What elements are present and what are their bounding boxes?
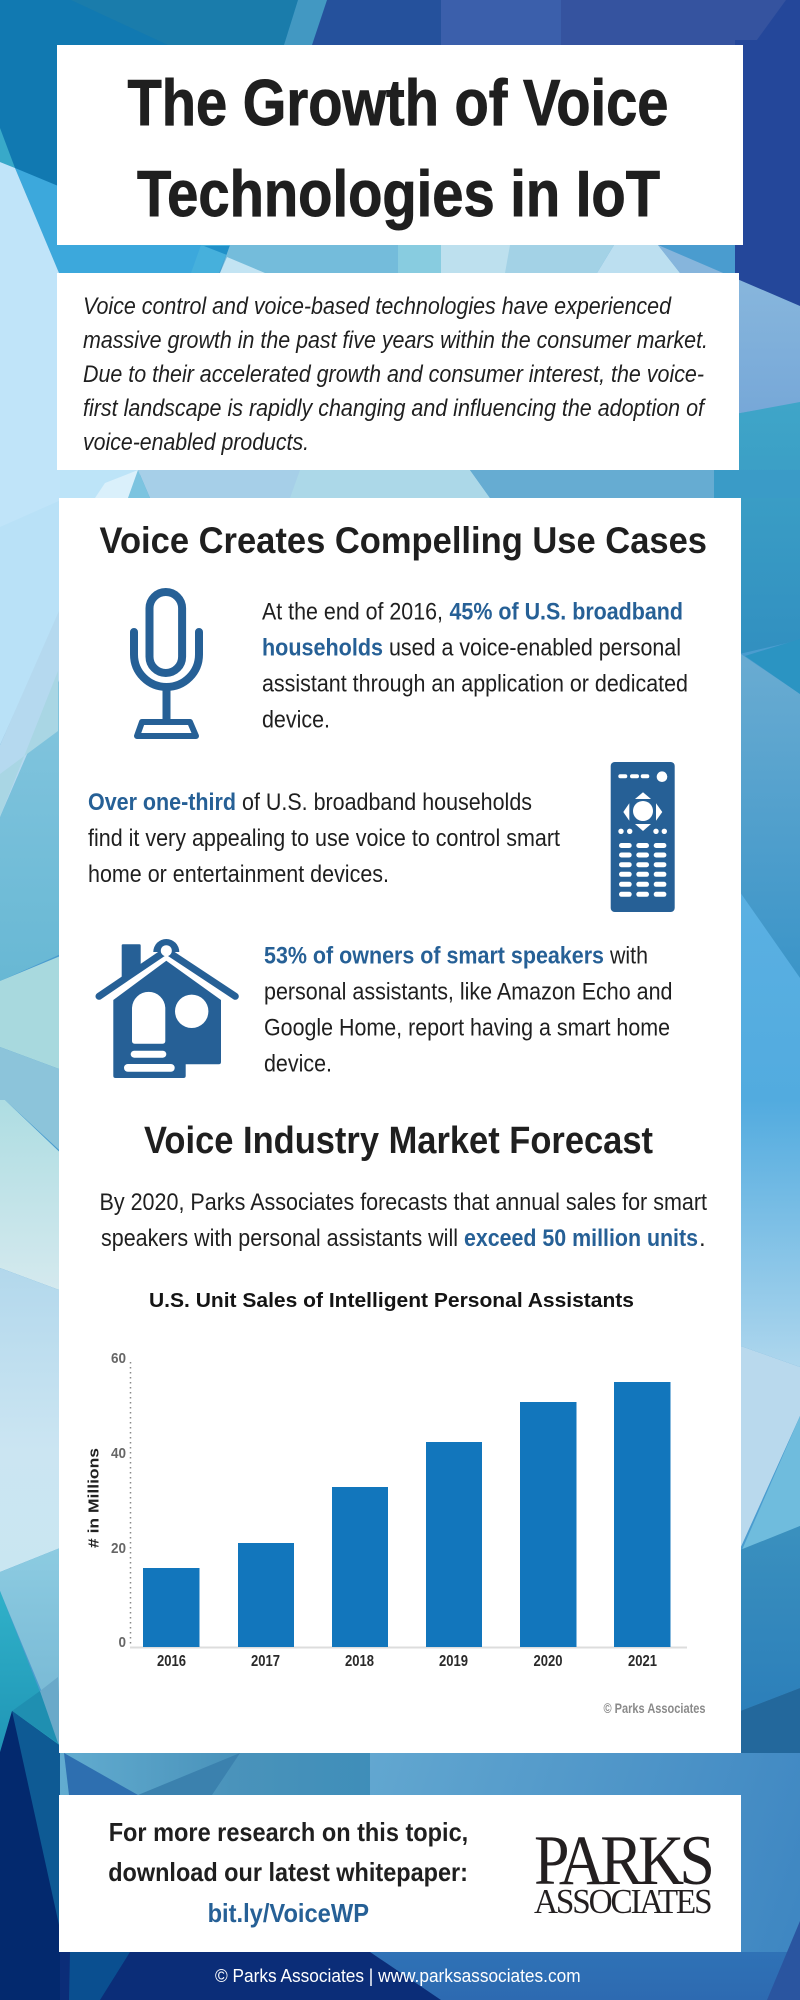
panel: title xyxy=(57,45,743,245)
text: over one-third: Over one-third xyxy=(88,789,236,816)
text: over one-third: of U.S. broadband households xyxy=(242,789,532,816)
text: forecast xyxy=(100,1189,707,1252)
text: forecast: . xyxy=(699,1225,706,1252)
logo: Parks Associates: ASSOCIATES xyxy=(534,1883,713,1921)
icon: smart home xyxy=(99,939,235,1078)
y-axis ticks xyxy=(111,1350,126,1651)
x-axis labels: 2021 xyxy=(628,1653,657,1670)
logo: Parks Associates: PARKS xyxy=(534,1821,715,1900)
y-axis label: # in Millions xyxy=(86,1448,102,1548)
title xyxy=(128,66,668,230)
text: 53% of owners: Google Home, report having a smart home xyxy=(264,1014,670,1042)
icon: microphone xyxy=(134,592,199,736)
intro text: voice-enabled products. xyxy=(83,429,309,456)
text: 45% of households: households xyxy=(262,634,383,662)
text: forecast: exceed 50 million units xyxy=(464,1225,698,1252)
text: 45% of households: assistant through an application or dedicated xyxy=(262,670,688,698)
text: 45% of households: used a voice-enabled personal xyxy=(389,634,681,662)
text: 45% of households: device. xyxy=(262,706,330,734)
text: 53% of owners: personal assistants, like Amazon Echo and xyxy=(264,978,672,1006)
text: forecast: speakers with personal assistants will xyxy=(101,1225,458,1252)
text: 45% of households: 45% of U.S. broadband xyxy=(450,598,683,626)
text: 45% of households: At the end of 2016, xyxy=(262,598,443,626)
text: over one-third: find it very appealing to use voice to control smart xyxy=(88,825,560,852)
y-axis ticks: 0 xyxy=(118,1634,126,1651)
text: 53% of owners: 53% of owners of smart speakers xyxy=(264,942,604,970)
heading: use cases: Voice Creates Compelling Use Cases xyxy=(100,520,707,561)
text: over one-third xyxy=(88,789,560,888)
y-axis ticks: 40 xyxy=(111,1445,126,1462)
x-axis labels: 2019 xyxy=(439,1653,468,1670)
call to action text: For more research on this topic, xyxy=(109,1817,468,1847)
call to action text: bit.ly/VoiceWP xyxy=(208,1898,369,1928)
x-axis labels: 2020 xyxy=(534,1653,562,1670)
panel: main content xyxy=(59,498,741,1753)
chart title: U.S. Unit Sales of Intelligent Personal Assistants xyxy=(149,1289,634,1312)
x-axis labels: 2017 xyxy=(251,1653,280,1670)
title: Technologies in IoT xyxy=(137,157,660,230)
y-axis ticks: 60 xyxy=(111,1350,126,1367)
icon: remote control xyxy=(611,762,675,912)
chart credit: © Parks Associates xyxy=(604,1700,706,1716)
title: The Growth of Voice xyxy=(128,66,668,139)
x-axis labels: 2016 xyxy=(157,1653,186,1670)
intro text: massive growth in the past five years within the consumer market. xyxy=(83,327,708,354)
text: 53% of owners xyxy=(264,942,672,1078)
bar chart xyxy=(86,1350,687,1670)
intro text: first landscape is rapidly changing and influencing the adoption of xyxy=(83,395,706,422)
call to action text xyxy=(108,1817,468,1928)
intro text: Due to their accelerated growth and consumer interest, the voice- xyxy=(83,361,704,388)
bars xyxy=(143,1382,670,1647)
text: forecast: By 2020, Parks Associates forecasts that annual sales for smart xyxy=(100,1189,707,1216)
text: 45% of households xyxy=(262,598,688,734)
heading: market forecast: Voice Industry Market Forecast xyxy=(144,1120,653,1162)
x-axis labels: 2018 xyxy=(345,1653,374,1670)
intro text: Voice control and voice-based technologies have experienced xyxy=(83,293,672,320)
footer credit: © Parks Associates | www.parksassociates.com xyxy=(215,1966,581,1986)
text: 53% of owners: device. xyxy=(264,1050,332,1078)
panel: call to action xyxy=(59,1795,741,1952)
text: 53% of owners: with xyxy=(609,942,648,970)
text: over one-third: home or entertainment devices. xyxy=(88,861,389,888)
x-axis labels xyxy=(157,1653,657,1670)
panel: introduction xyxy=(57,273,739,470)
intro text xyxy=(83,293,708,456)
call to action text: download our latest whitepaper: xyxy=(108,1857,468,1887)
y-axis ticks: 20 xyxy=(111,1540,126,1557)
